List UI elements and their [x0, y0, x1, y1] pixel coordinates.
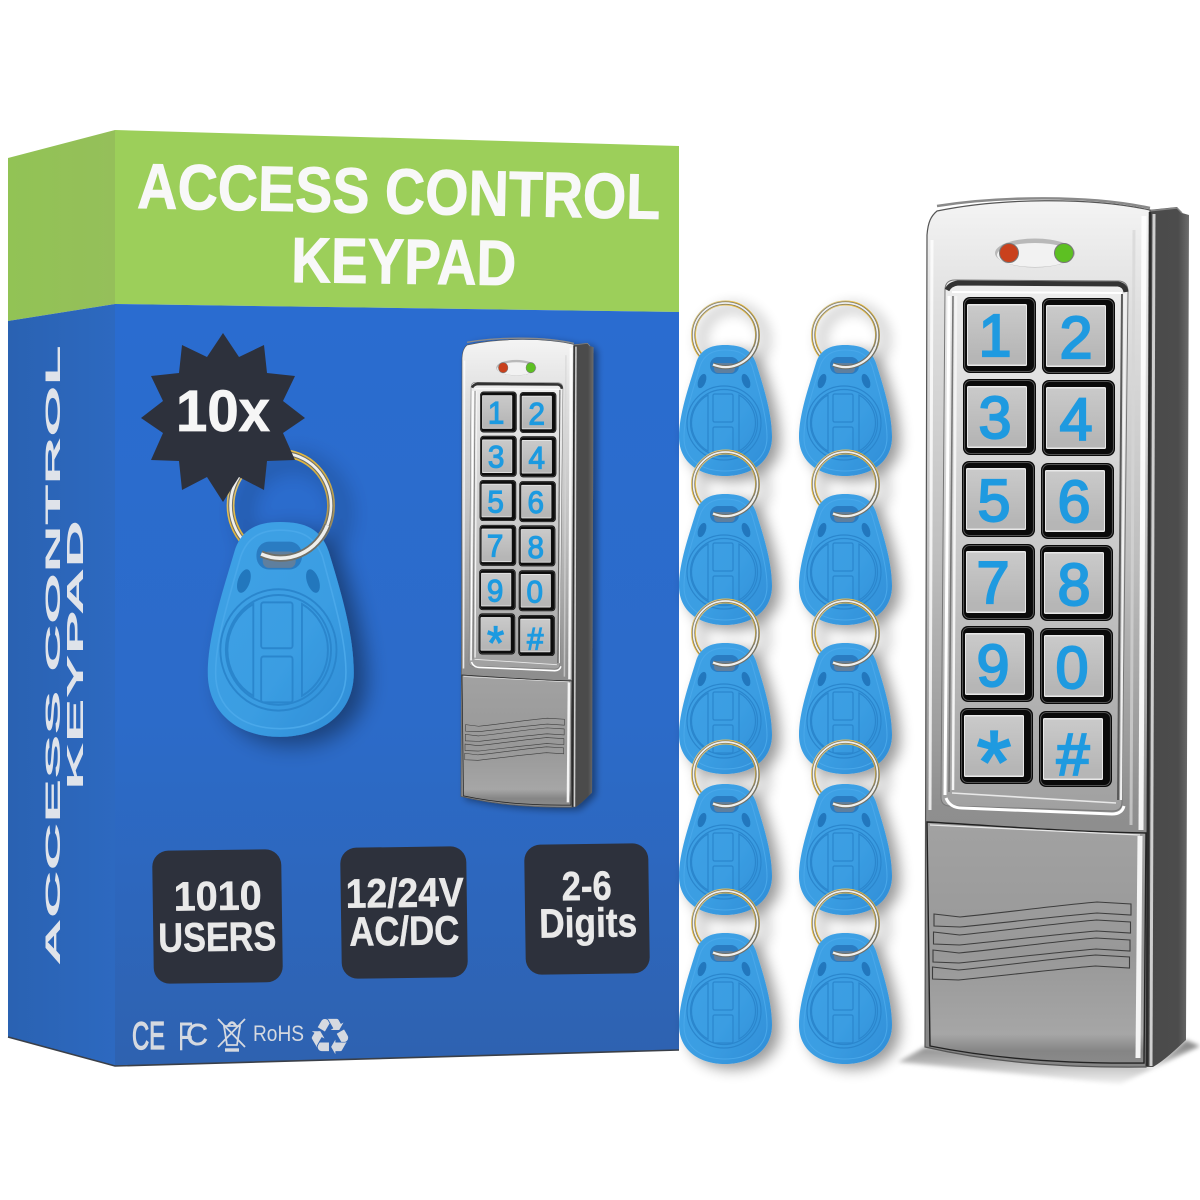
box side: blue face: [8, 304, 115, 1066]
side title: KEYPAD: [62, 520, 88, 790]
key fob column 2: [799, 303, 892, 1064]
keypad on box: #: [527, 621, 544, 657]
large keypad floor shadow: [898, 1040, 1200, 1084]
key digits: 6: [1058, 469, 1090, 535]
key digits: #: [1057, 722, 1090, 788]
badge: 1010 users: [152, 849, 283, 984]
keypad on box: *: [487, 615, 504, 669]
keypad on box: 3: [488, 439, 504, 475]
badge: 1010 users: USERS: [158, 913, 277, 961]
title: [137, 150, 661, 299]
key digits: 7: [977, 550, 1009, 616]
badge: digits: Digits: [539, 899, 638, 947]
FCC mark: F: [178, 1015, 193, 1059]
CE mark: CE: [132, 1015, 165, 1058]
box front: blue face: [115, 304, 679, 1066]
side title: ACCESS CONTROL: [42, 345, 65, 966]
10x starburst badge: 10x: [176, 379, 270, 444]
badge: digits: 2-6: [561, 863, 612, 909]
key digits: 2: [1060, 305, 1092, 371]
badge: voltage: AC/DC: [349, 907, 460, 955]
box front: green header: [115, 130, 679, 312]
key digits: 3: [979, 385, 1011, 451]
key digits: 4: [1060, 387, 1092, 453]
key digits: 8: [1058, 552, 1090, 618]
title: ACCESS CONTROL: [137, 150, 661, 233]
key digits: 9: [977, 633, 1009, 699]
box package: [8, 130, 679, 1066]
badge: voltage: [340, 846, 468, 979]
keypad on box: 0: [527, 574, 543, 610]
key digits: 1: [979, 303, 1011, 369]
key digits: [977, 303, 1092, 811]
key digits: 5: [978, 468, 1010, 534]
large keypad device: [925, 198, 1189, 1067]
keypad on box: 8: [528, 529, 544, 565]
keypad on box: [461, 338, 594, 807]
icon: recycling: ♻: [308, 1008, 352, 1066]
box side: green band: [8, 130, 115, 321]
certification marks: [132, 1008, 352, 1066]
keypad on box: 5: [487, 483, 504, 520]
FCC mark: C: [186, 1017, 208, 1052]
key fob column 1: [679, 303, 772, 1064]
keypad on box: 1: [488, 394, 504, 431]
10x starburst badge: [141, 333, 305, 502]
box bottom edge: [8, 1037, 679, 1066]
key fob on box: [208, 453, 354, 737]
key digits: 0: [1056, 635, 1088, 701]
side title: [42, 345, 88, 966]
key digits: *: [977, 712, 1011, 811]
keypad on box: 7: [487, 528, 503, 564]
keypad on box: 2: [529, 395, 545, 432]
keypad on box: 9: [487, 573, 503, 609]
keypad on box: 6: [528, 484, 544, 520]
badge: 1010 users: 1010: [173, 872, 262, 920]
keypad on box: 4: [529, 440, 545, 476]
badge: voltage: 12/24V: [345, 869, 465, 917]
RoHS mark: RoHS: [253, 1021, 304, 1046]
title: KEYPAD: [291, 224, 517, 299]
icon: crossed-out bin: [218, 1019, 245, 1050]
badge: digits: [524, 843, 650, 975]
